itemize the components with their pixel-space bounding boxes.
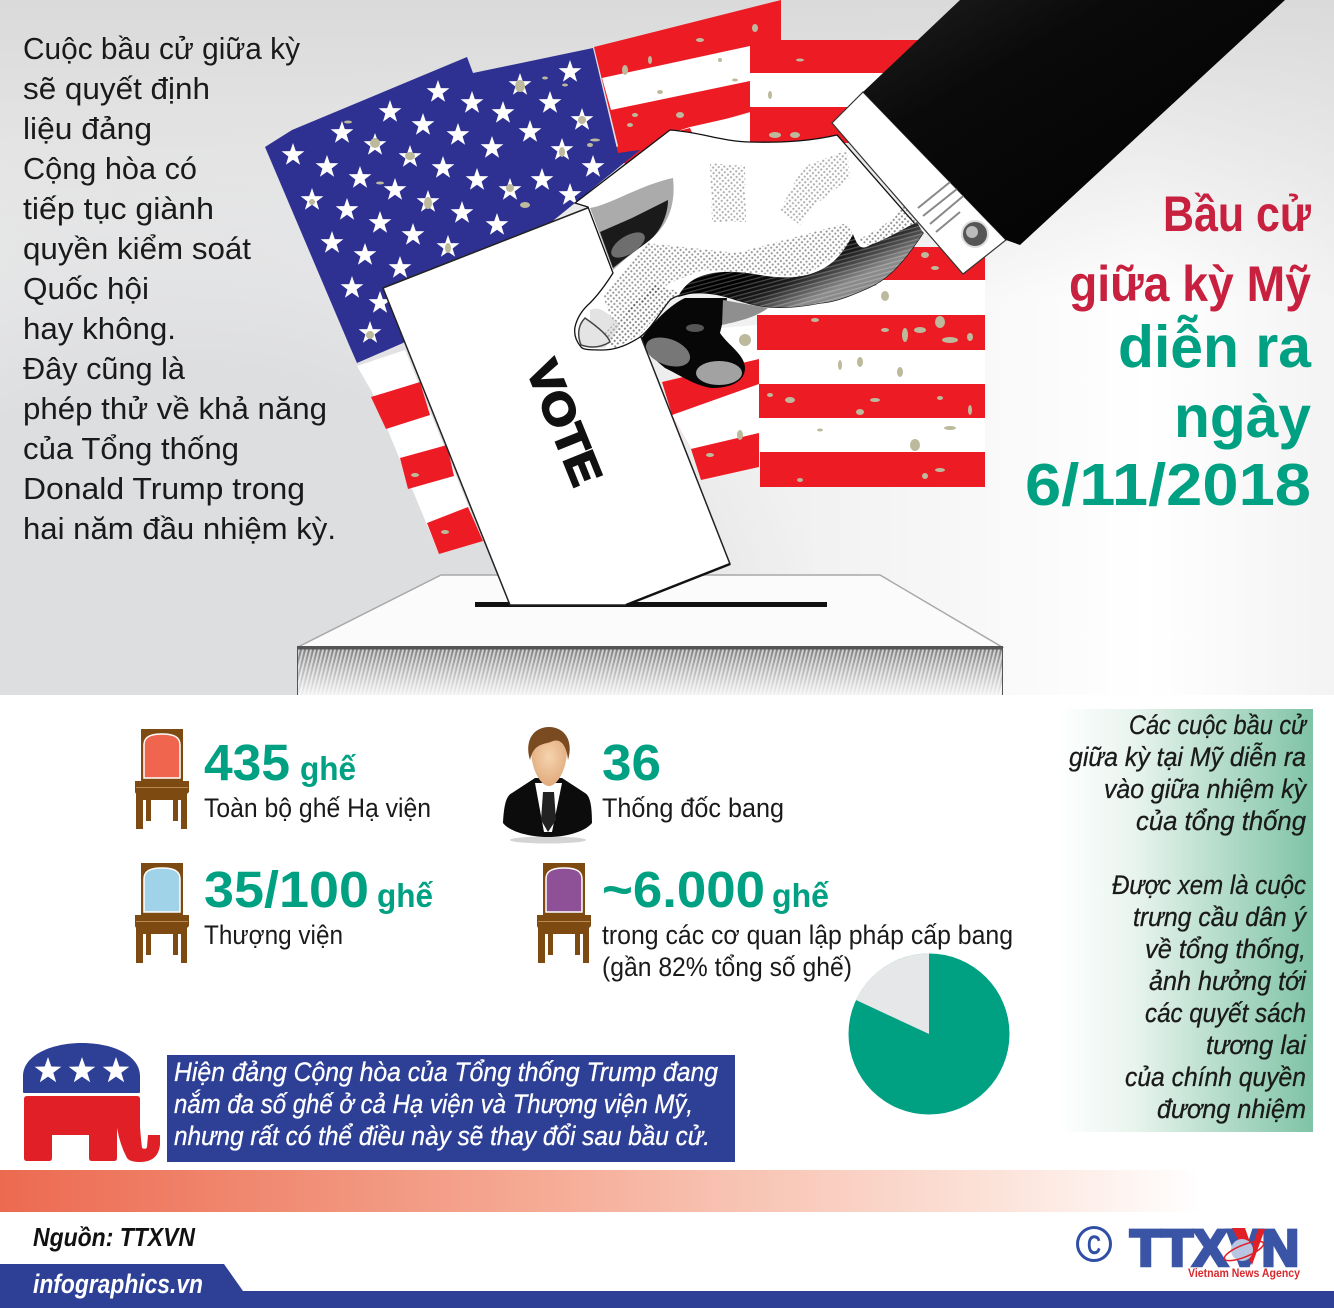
icon: purple chair	[537, 863, 591, 963]
intro paragraph: hai năm đầu nhiệm kỳ.	[23, 511, 336, 546]
stat: house seats	[204, 734, 431, 823]
stat: state legislature seats: trong các cơ quan lập pháp cấp bang	[602, 920, 1013, 950]
intro paragraph: hay không.	[23, 311, 176, 346]
background panel	[0, 0, 1334, 695]
side panel: context notes: trưng cầu dân ý	[1133, 902, 1307, 932]
callout: republican majority	[167, 1055, 735, 1162]
intro paragraph: sẽ quyết định	[23, 71, 210, 106]
side panel: context notes: vào giữa nhiệm kỳ	[1104, 774, 1307, 804]
stat: senate seats: ghế	[377, 877, 434, 914]
intro paragraph: Donald Trump trong	[23, 471, 305, 506]
side panel: context notes: ảnh hưởng tới	[1149, 966, 1307, 996]
stat: senate seats: Thượng viện	[204, 920, 343, 950]
intro paragraph: quyền kiểm soát	[23, 231, 251, 266]
title	[1025, 186, 1312, 518]
icon: governor person	[503, 727, 592, 844]
intro paragraph: Đây cũng là	[23, 351, 186, 386]
side panel: context notes: giữa kỳ tại Mỹ diễn ra	[1069, 741, 1306, 772]
flag distress specks	[309, 24, 973, 534]
flag stars	[282, 60, 604, 343]
title: 6/11/2018	[1025, 452, 1311, 518]
logo: TTXVN: Vietnam News Agency	[1188, 1268, 1301, 1280]
pie chart: 82 percent	[848, 954, 1010, 1114]
callout: republican majority: Hiện đảng Cộng hòa của Tổng thống Trump đang	[174, 1057, 718, 1087]
intro paragraph: của Tổng thống	[23, 431, 239, 466]
side panel: context notes: về tổng thống,	[1145, 934, 1306, 964]
stat: state legislature seats: ghế	[772, 877, 830, 914]
stat: governors	[602, 734, 784, 823]
side panel: context notes: các quyết sách	[1145, 998, 1306, 1028]
stat: governors: 36	[602, 734, 661, 791]
icon: red chair	[135, 729, 189, 829]
stat: state legislature seats: ~6.000	[602, 861, 765, 918]
stat: senate seats	[204, 861, 434, 950]
curled fingers	[640, 298, 768, 388]
stat: senate seats: 35/100	[204, 861, 369, 918]
footer bar with site name	[0, 1264, 1334, 1308]
ballot text: VOTE	[517, 353, 611, 492]
intro paragraph: Cộng hòa có	[23, 151, 197, 186]
intro paragraph: tiếp tục giành	[23, 191, 214, 226]
title: diễn ra	[1118, 314, 1312, 380]
hand	[575, 130, 923, 350]
shirt cuff	[832, 92, 1006, 274]
stat: state legislature seats: (gần 82% tổng số ghế)	[602, 952, 852, 982]
title: giữa kỳ Mỹ	[1069, 256, 1311, 312]
side panel: context notes: Được xem là cuộc	[1112, 870, 1306, 900]
side panel: context notes: tương lai	[1206, 1030, 1307, 1060]
icon: republican elephant	[23, 1043, 160, 1162]
illustration: hand casting ballot	[265, 0, 1285, 695]
ballot paper	[383, 207, 730, 605]
intro paragraph: liệu đảng	[23, 111, 152, 146]
stat: house seats: ghế	[300, 750, 357, 787]
gradient band	[0, 1170, 1334, 1212]
source credit: Nguồn: TTXVN	[33, 1222, 196, 1252]
intro paragraph: phép thử về khả năng	[23, 391, 327, 426]
american flag	[265, 0, 985, 554]
intro paragraph	[23, 31, 336, 546]
title: Bầu cử	[1163, 186, 1312, 242]
footer bar with site name: infographics.vn	[33, 1269, 203, 1299]
icon: blue chair	[135, 863, 189, 963]
callout: republican majority: nhưng rất có thể điều này sẽ thay đổi sau bầu cử.	[174, 1121, 710, 1151]
ballot box	[297, 575, 1003, 695]
intro paragraph: Quốc hội	[23, 271, 149, 306]
callout: republican majority: nắm đa số ghế ở cả Hạ viện và Thượng viện Mỹ,	[174, 1088, 693, 1119]
suit sleeve	[863, 0, 1285, 245]
title: ngày	[1174, 384, 1311, 450]
side panel: context notes: của tổng thống	[1136, 806, 1306, 836]
side panel: context notes: đương nhiệm	[1157, 1094, 1306, 1124]
stat: house seats: Toàn bộ ghế Hạ viện	[204, 793, 431, 823]
logo: TTXVN: C	[1087, 1230, 1101, 1260]
stat: state legislature seats	[602, 861, 1013, 982]
intro paragraph: Cuộc bầu cử giữa kỳ	[23, 31, 300, 66]
stat: house seats: 435	[204, 734, 290, 791]
side panel: context notes: của chính quyền	[1125, 1062, 1306, 1092]
side panel: context notes	[1058, 709, 1313, 1132]
logo: TTXVN: TTXVN	[1130, 1220, 1299, 1276]
side panel: context notes: Các cuộc bầu cử	[1129, 710, 1308, 740]
stat: governors: Thống đốc bang	[602, 793, 784, 823]
